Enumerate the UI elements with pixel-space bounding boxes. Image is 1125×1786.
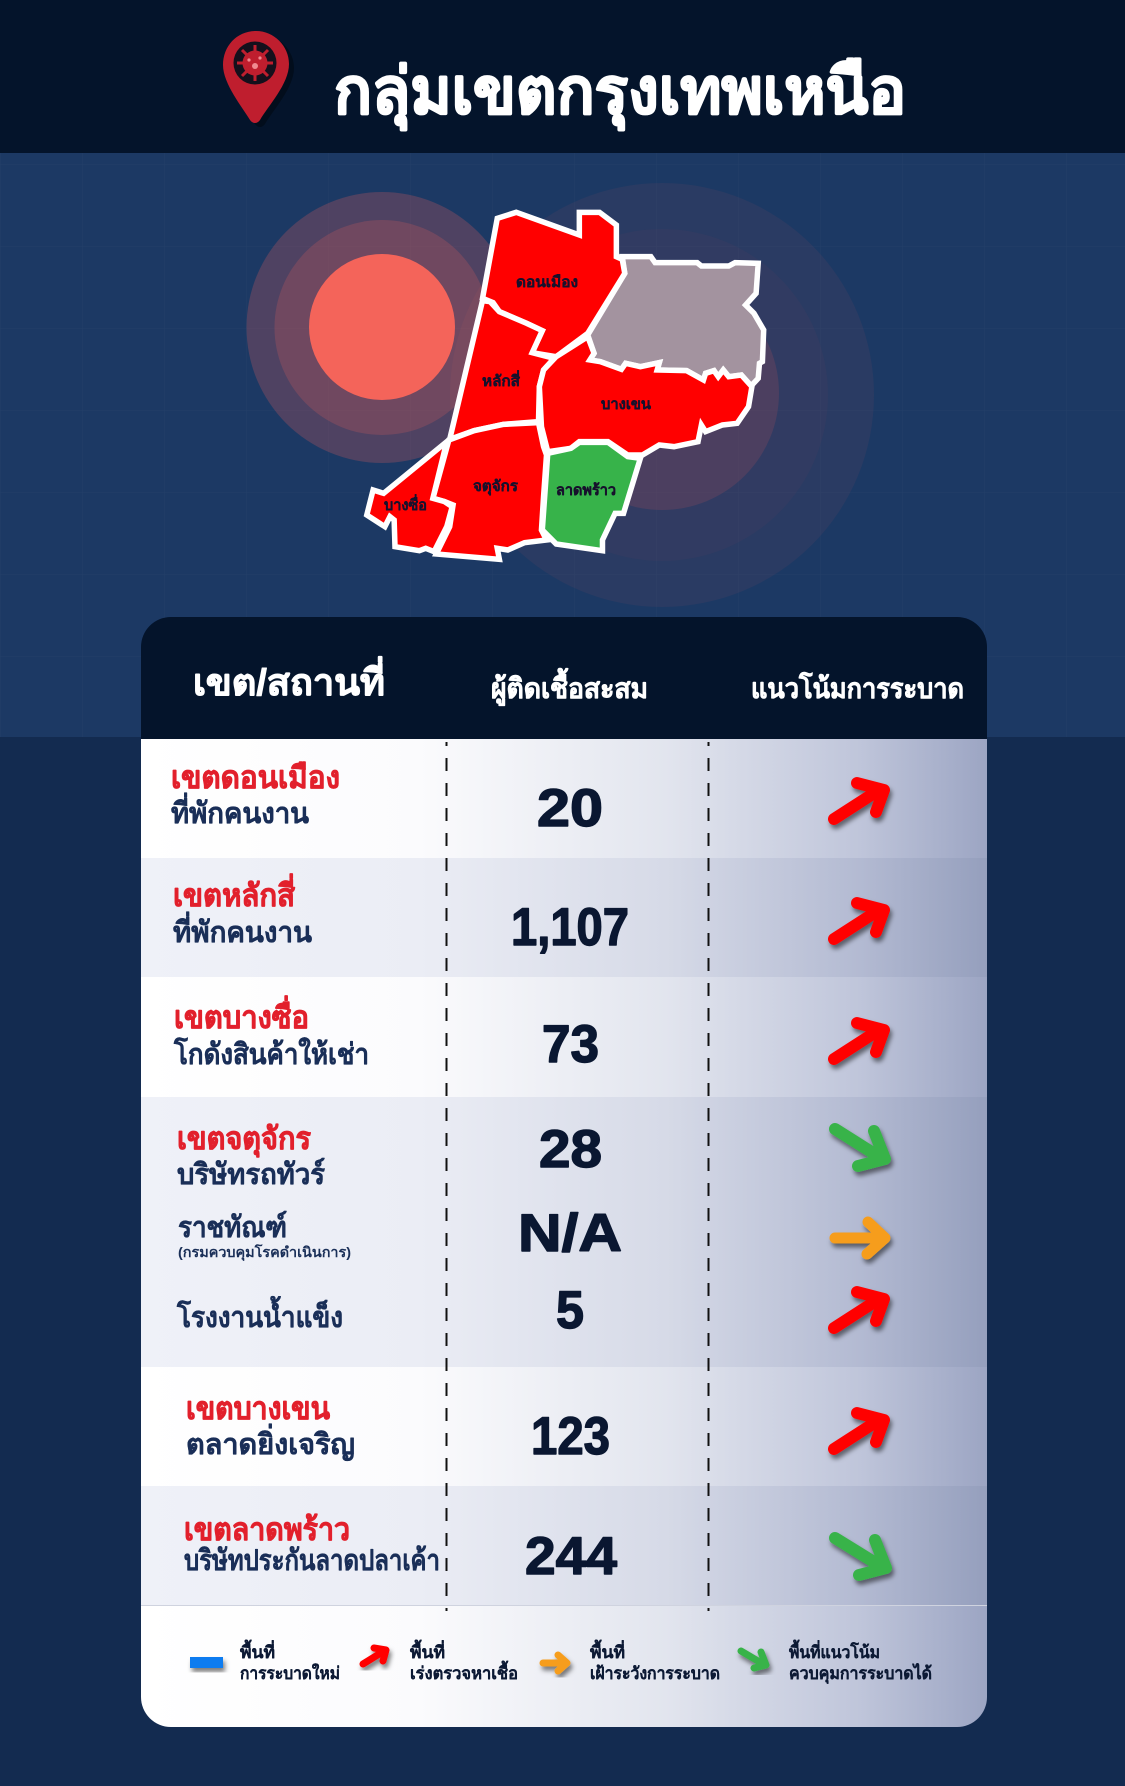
row: Chatuchak tour company: 28 (539, 1120, 602, 1179)
row: Lat Phrao (184, 1512, 886, 1586)
row: Lak Si: ที่พักคนงาน (173, 911, 312, 949)
legend (190, 1639, 932, 1684)
map area: Bang Khen (539, 337, 752, 455)
map area: Don Mueang (483, 212, 625, 357)
legend: new outbreak (190, 1639, 340, 1683)
row: Ratchathan: (กรมควบคุมโรคดำเนินการ) (178, 1243, 351, 1261)
row: ice factory (176, 1281, 884, 1340)
row: Ratchathan: ราชทัณฑ์ (178, 1210, 287, 1244)
legend: controllable trend: พื้นที่แนวโน้ม (789, 1639, 880, 1662)
title: กลุ่มเขตกรุงเทพเหนือ (334, 55, 906, 131)
map area: Lak Si (450, 301, 554, 439)
legend: new outbreak: พื้นที่ (240, 1639, 275, 1662)
row: Don Mueang: ที่พักคนงาน (171, 792, 309, 830)
legend: controllable trend: ควบคุมการระบาดได้ (789, 1663, 932, 1684)
header band (0, 0, 1125, 153)
legend: accelerate testing: พื้นที่ (410, 1639, 445, 1662)
column heading: outbreak trend: แนวโน้มการระบาด (751, 671, 964, 704)
column heading: cumulative cases: ผู้ติดเชื้อสะสม (491, 667, 648, 706)
table card (141, 617, 987, 1727)
row: Lat Phrao: เขตลาดพร้าว (184, 1512, 350, 1547)
row: Lat Phrao: 244 (525, 1527, 618, 1586)
table rows backgrounds (141, 617, 987, 1727)
row: Lak Si (173, 873, 884, 957)
map label: Lak Si: หลักสี่ (482, 370, 521, 390)
row: Ratchathan: N/A (518, 1204, 622, 1263)
legend: surveillance: พื้นที่ (590, 1639, 625, 1662)
row: Bang Sue: 73 (542, 1015, 599, 1074)
row: Don Mueang (171, 760, 884, 838)
row: Bang Sue: เขตบางซื่อ (174, 995, 309, 1035)
map area: Chatuchak (433, 423, 547, 559)
map area: Bang Sue (367, 442, 452, 552)
row: Bang Sue (173, 995, 884, 1074)
column heading: district / place: เขต/สถานที่ (193, 656, 385, 703)
map area: Lat Phrao (542, 442, 640, 551)
row: ice factory: 5 (556, 1281, 584, 1340)
map label: Bang Sue: บางซื่อ (384, 494, 427, 514)
legend: surveillance (543, 1639, 720, 1683)
map label: Bang Khen: บางเขน (601, 396, 652, 413)
row: Don Mueang: เขตดอนเมือง (171, 760, 340, 795)
row: Don Mueang: 20 (537, 779, 603, 838)
map label: Don Mueang: ดอนเมือง (516, 274, 578, 291)
row: Chatuchak tour company: เขตจตุจักร (177, 1121, 311, 1158)
row: Lak Si: เขตหลักสี่ (173, 873, 295, 913)
row: Bang Sue: โกดังสินค้าให้เช่า (173, 1036, 369, 1071)
icon: virus location pin (223, 31, 294, 127)
legend: accelerate testing (363, 1639, 518, 1683)
legend: controllable trend (741, 1639, 932, 1684)
map label: Chatuchak: จตุจักร (473, 478, 519, 496)
row: Bang Khen: 123 (531, 1407, 610, 1466)
row: Lak Si: 1,107 (511, 898, 629, 957)
decorative circles: right (450, 183, 874, 607)
district map (367, 212, 764, 559)
legend: surveillance: เฝ้าระวังการระบาด (590, 1664, 720, 1683)
decorative circles: left (246, 192, 518, 463)
row: Lat Phrao: บริษัทประกันลาดปลาเค้า (184, 1545, 440, 1577)
row: Bang Khen: เขตบางเขน (186, 1391, 330, 1426)
row: Chatuchak tour company (177, 1120, 885, 1191)
map area: gray district (588, 257, 764, 386)
row: Bang Khen (186, 1391, 884, 1466)
legend: new outbreak: การระบาดใหม่ (240, 1663, 340, 1683)
map section background (0, 153, 1125, 737)
map label: Lat Phrao: ลาดพร้าว (556, 482, 616, 499)
row: ice factory: โรงงานน้ำแข็ง (176, 1295, 343, 1334)
row: Chatuchak tour company: บริษัทรถทัวร์ (177, 1157, 325, 1191)
row: Bang Khen: ตลาดยิ่งเจริญ (186, 1423, 355, 1462)
legend: accelerate testing: เร่งตรวจหาเชื้อ (410, 1660, 518, 1683)
row: Ratchathan (178, 1204, 885, 1263)
